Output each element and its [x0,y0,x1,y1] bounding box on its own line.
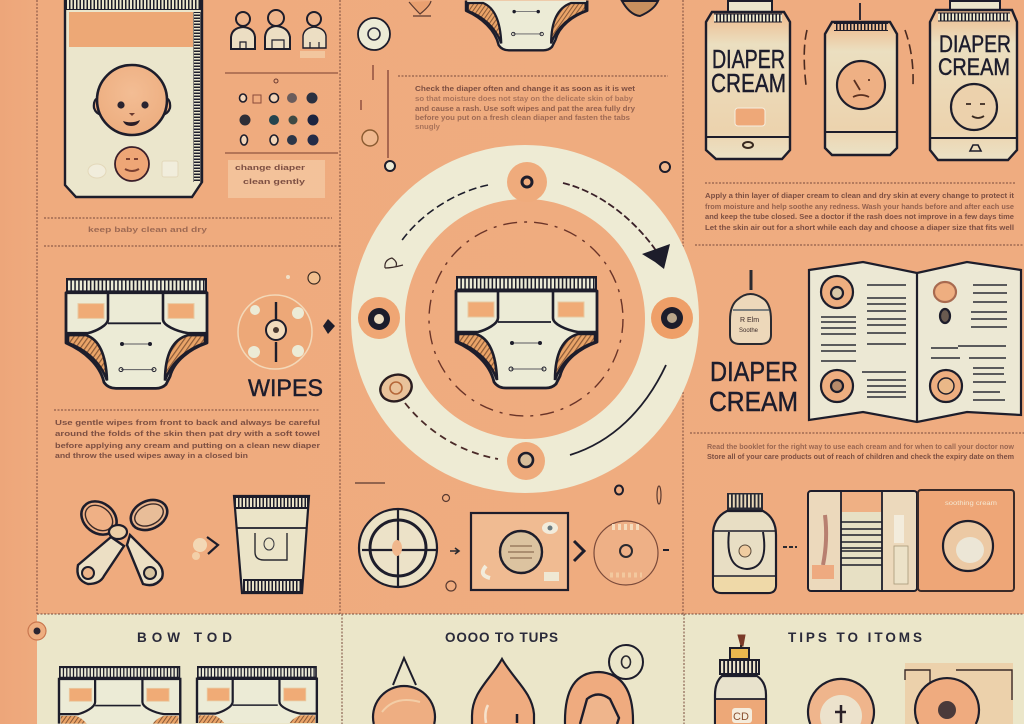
icons: booklet circles [821,276,962,402]
text block: top centre: Check the diaper often and change it as soon as it is wet [415,84,636,93]
icon: small medallion [115,147,149,181]
text block: top centre: snugly [415,122,441,131]
text block: top centre [398,76,668,131]
text block: top centre: and cause a rash. Use soft wipes and pat the area fully dry [415,104,636,113]
text block: wipes [54,410,320,460]
bottle 2 [804,3,913,155]
arrow: chevron [574,541,584,561]
text block: pink legend note [228,160,325,198]
panel: baby package [65,0,202,197]
ring [378,172,672,466]
panel: open booklet [809,262,1021,422]
label: wipes: WIPES [248,375,323,402]
text block: wipes: around the folds of the skin then pat dry with a soft towel [55,429,320,438]
node: bottom [507,442,545,480]
icon: top leaves [409,1,658,16]
label: diaper cream: DIAPER [710,356,798,387]
icon: band marker [28,622,46,640]
node: left [358,297,400,339]
node: top [507,162,547,202]
text block: wipes: before applying any cream and putting on a clean new diaper [55,441,320,450]
icon: small cream jar: R Elm [740,317,759,324]
text block: right centre [690,433,1024,461]
bottle 1: CREAM [711,68,786,98]
bottle 3: CREAM [938,54,1010,81]
icon: round care badge [808,679,874,724]
diagram: central diaper cycle [358,162,693,480]
bottom left diaper [59,666,180,724]
node: lower left [377,370,415,406]
icon: top centre round badge [358,18,390,50]
icon: scissors [75,494,172,585]
text block: top right [705,183,1015,232]
icon: bottle bottom right of main grid [713,493,797,593]
icon: baby face [94,65,170,135]
icon: cream cup [234,496,309,593]
heading: tips to items: TIPS TO ITOMS [788,630,922,645]
panel: striped care card [808,491,917,591]
arrow: top right with arrowhead [563,183,670,269]
icon: arrow marker small [450,548,459,554]
panel: bottom tips band [37,614,1024,724]
icon: egg with ring [565,645,643,724]
inner dashed circle [429,222,623,416]
text block: pink legend note: clean gently [243,177,306,186]
text: left caption: keep baby clean and dry [88,225,208,234]
panel: cream swatch card [918,490,1014,591]
icon: clock dial [238,272,335,369]
icon: small cream jar [730,270,771,344]
text block: wipes: Use gentle wipes from front to back and always be careful [55,418,320,427]
icon group: three people [231,10,326,58]
node: right [651,297,693,339]
text block: top right: Apply a thin layer of diaper cream to clean and dry skin at every change to protect it [705,191,1015,200]
icon: target circle [359,509,437,587]
text block: right centre: Store all of your care products out of reach of children and check the expiry date on them [707,452,1014,461]
icon: framed round swatch [905,663,1013,724]
arrow: bottom left [405,403,498,459]
bottle 3 [930,1,1017,160]
text block: right centre: Read the booklet for the right way to use each cream and for when to call your doctor now [707,442,1014,451]
left diaper [66,278,207,388]
icon: droplet with circle [373,658,435,724]
heading: how to: BOW TOD [137,630,232,645]
node: upper left [385,258,403,268]
icon: water drop [472,659,534,724]
top centre diaper [466,0,587,50]
icon: arrow with puff [192,537,218,560]
timeline: vertical line with nodes [361,65,670,172]
faded emblems [88,161,178,178]
panel: cream swatch card: soothing cream [945,501,997,507]
text block: top centre: so that moisture does not stay on the delicate skin of baby [415,94,634,103]
icon: small accents [355,483,661,591]
text block: top right: Let the skin air out for a short while each day and choose a diaper size that fits well [705,223,1014,232]
arrow: top left [400,185,488,243]
text block: pink legend note: change diaper [235,163,305,172]
icon: dial circle [594,521,669,585]
icon: small cream jar: Soothe [739,328,759,334]
label: diaper cream: CREAM [709,386,798,417]
bottle 1: DIAPER [712,44,785,74]
icon: cream tube bottle: CD [733,711,749,723]
text block: wipes: and throw the used wipes away in a closed bin [55,451,248,460]
panel: diaper cream bottles [706,1,1017,160]
bottle 1 [706,1,790,159]
heading: to tips: OOOO TO TUPS [445,630,558,645]
arrow: bottom right [570,365,666,455]
text block: top right: and keep the tube closed. See a doctor if the rash does not improve in a few days time [705,212,1014,221]
text block: top right: from moisture and help soothe any redness. Wash your hands before and after each use [705,202,1014,211]
icon: cream tube bottle [715,635,766,724]
bottom second diaper [197,666,317,723]
label: diaper cream [709,356,798,417]
text block: top centre: before you put on a fresh clean diaper and fasten the tabs [415,113,630,122]
booklet text lines [821,285,1007,400]
central diaper [456,276,597,388]
chart: dot grid legend [225,73,338,153]
icon: photo frame [471,513,568,590]
